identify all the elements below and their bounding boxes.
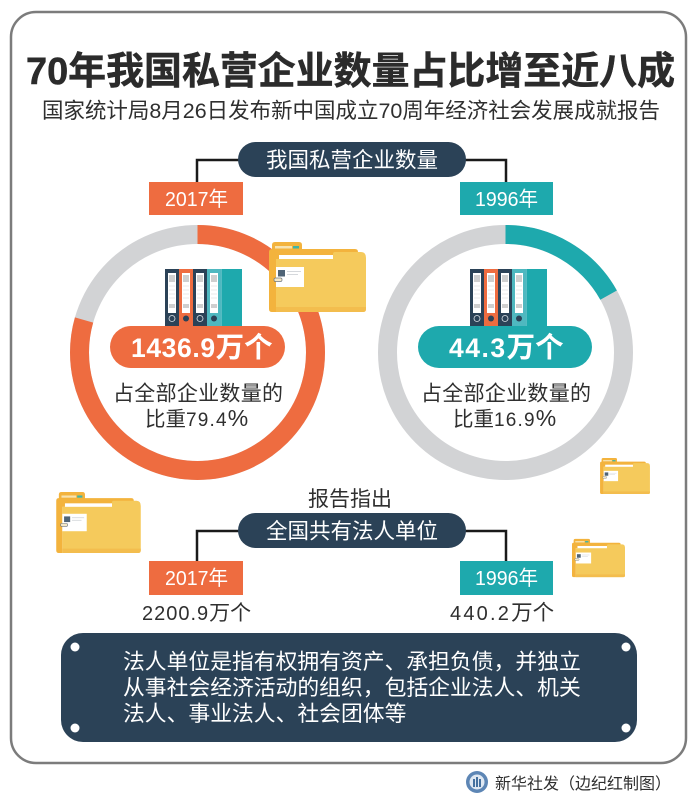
text: 2017 share: 比重79.4% <box>145 405 248 431</box>
label: 1996 legal entities <box>460 561 553 595</box>
value: 2200.9: 2200.9万个 <box>142 602 251 625</box>
icon: small folder upper right <box>600 458 650 494</box>
credit: 新华社发（边纪红制图） <box>495 775 671 793</box>
icon: small folder lower right <box>572 539 625 577</box>
text: 2017 share: 占全部企业数量的 <box>113 382 283 406</box>
text: 2017 share <box>113 382 283 431</box>
icon: binders 1996 <box>470 269 547 326</box>
heading pill: private enterprise count <box>238 142 466 177</box>
heading pill: private enterprise count: 我国私营企业数量 <box>266 148 438 172</box>
icon: binders 2017 <box>165 269 242 326</box>
text: 1996 share: 占全部企业数量的 <box>421 382 591 406</box>
definition panel <box>61 633 637 742</box>
label: 1996: 1996年 <box>475 188 538 211</box>
icon: folder lower left <box>56 492 141 553</box>
connector: private enterprises <box>197 160 506 183</box>
label: 2017 legal entities <box>149 561 243 595</box>
value: 440.2: 440.2万个 <box>450 601 554 625</box>
value pill: 1436.9 <box>110 326 285 368</box>
text: report notes: 报告指出 <box>308 488 392 511</box>
icon: Xinhua logo <box>466 771 488 793</box>
definition text: 法人、事业法人、社会团体等 <box>123 701 406 726</box>
label: 1996 legal entities: 1996年 <box>475 567 538 590</box>
donut chart: 1996, 16.9% <box>388 234 624 470</box>
text: 1996 share <box>421 382 591 431</box>
heading pill: legal entities: 全国共有法人单位 <box>266 520 438 544</box>
title: 70年我国私营企业数量占比增至近八成 <box>26 51 675 93</box>
definition text <box>123 649 581 726</box>
value pill: 1436.9: 1436.9万个 <box>131 332 273 364</box>
donut chart: 2017, 79.4% <box>80 234 316 470</box>
icon: large folder <box>269 242 366 312</box>
definition text: 从事社会经济活动的组织，包括企业法人、机关 <box>123 675 581 700</box>
label: 2017: 2017年 <box>165 188 228 211</box>
label: 1996 <box>460 182 553 215</box>
text: 1996 share: 比重16.9% <box>453 405 556 431</box>
label: 2017 legal entities: 2017年 <box>165 567 228 590</box>
subtitle: 国家统计局8月26日发布新中国成立70周年经济社会发展成就报告 <box>42 99 660 123</box>
heading pill: legal entities <box>238 513 466 548</box>
definition text: 法人单位是指有权拥有资产、承担负债，并独立 <box>123 649 581 674</box>
value pill: 44.3 <box>418 326 592 368</box>
label: 2017 <box>149 182 243 215</box>
value pill: 44.3: 44.3万个 <box>449 332 564 364</box>
connector: legal entities <box>197 531 506 561</box>
